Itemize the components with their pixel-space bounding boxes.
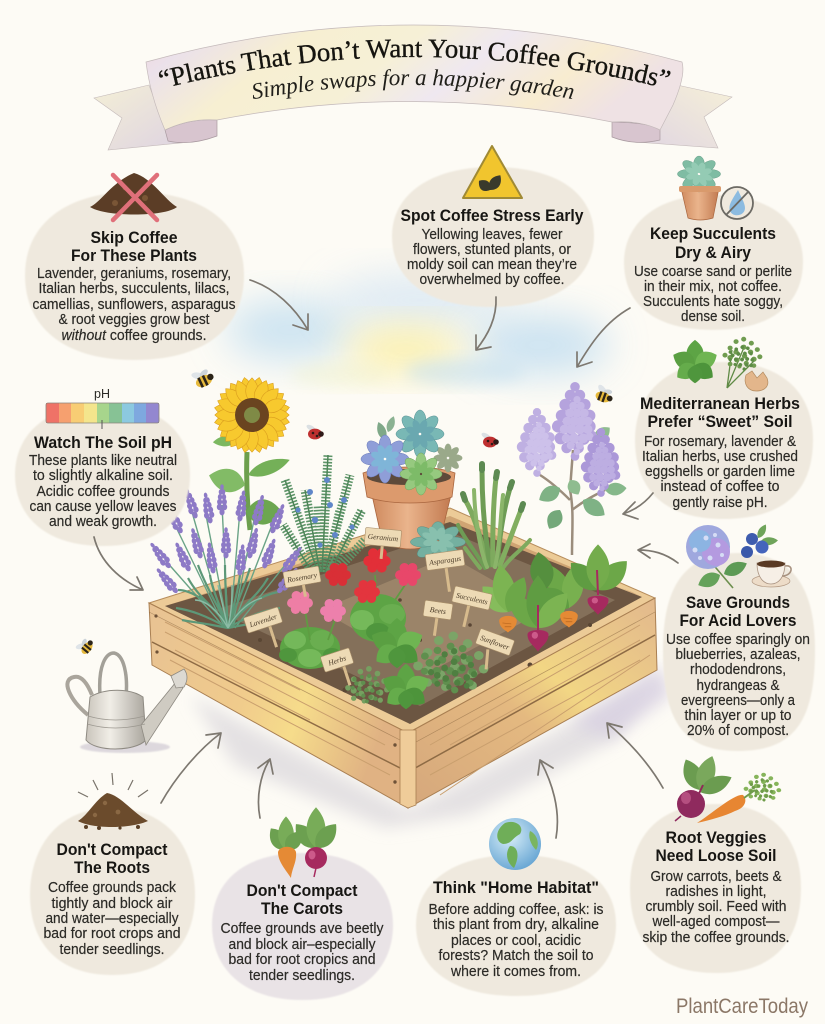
text block: camellias, sunflowers, asparagus (32, 297, 236, 313)
label: Succulents: Succulents (455, 590, 489, 606)
icon: globe (489, 818, 541, 870)
heading (71, 228, 197, 265)
label: Asparagus (425, 549, 468, 594)
bed soil (165, 522, 642, 724)
icon: bee near lilac (592, 382, 616, 405)
icon: ph scale (46, 387, 159, 429)
text block: Succulents hate soggy, (643, 294, 783, 310)
label: Lavender: Lavender (247, 612, 278, 629)
text block: tightly and block air (52, 896, 173, 912)
heading: The Carots (261, 899, 343, 918)
text block: this plant from dry, alkaline (433, 917, 599, 933)
arrow: carots to bed (258, 759, 273, 818)
plant: lavender (147, 484, 305, 628)
text block: Use coffee sparingly on (666, 632, 810, 648)
panel: skip coffee (25, 173, 244, 360)
plant: potted succulents (361, 410, 462, 549)
icon: coffee pile crossed out (90, 173, 177, 220)
text block: gently raise pH. (672, 495, 768, 511)
heading (656, 828, 776, 865)
text block: to slightly alkaline soil. (33, 468, 173, 484)
icon: eggshell (745, 371, 768, 391)
arrow: home habitat to bed (538, 760, 557, 838)
bed corner post (400, 730, 416, 808)
label: Succulents (447, 586, 492, 632)
raised wooden garden bed (149, 508, 657, 808)
heading: Skip Coffee (90, 228, 178, 247)
heading (246, 881, 358, 918)
label: Sunflower (468, 628, 515, 676)
heading: Dry & Airy (675, 243, 751, 262)
icon: soil pile with arrows (78, 773, 148, 830)
text block: hydrangeas & (696, 678, 780, 694)
panel: think home habitat (416, 818, 616, 996)
text block: and water—especially (46, 911, 179, 927)
panel: root veggies (630, 753, 801, 973)
heading: For Acid Lovers (680, 611, 796, 630)
panel: spot coffee stress (392, 146, 594, 307)
icon: hydrangea (686, 525, 750, 591)
text block: moldy soil can mean they’re (407, 257, 577, 273)
icon: ladybug (305, 423, 324, 439)
plant: asparagus (458, 464, 530, 568)
heading: Don't Compact (246, 881, 358, 900)
label: Rosemary: Rosemary (286, 570, 318, 585)
heading: For These Plants (71, 246, 197, 265)
text block: skip the coffee grounds. (642, 930, 790, 946)
subtitle: Simple swaps for a happier garden (253, 69, 574, 99)
text block: Before adding coffee, ask: is (428, 902, 604, 918)
icon: no water (721, 187, 753, 219)
text block: Yellowing leaves, fewer (422, 227, 563, 243)
label: Beets: Beets (429, 605, 447, 616)
text block: thin layer or up to (684, 708, 792, 724)
plant: root vegetables (475, 544, 634, 651)
bed outer rim (149, 508, 655, 733)
text block (666, 632, 810, 739)
heading (680, 593, 796, 630)
bed right face (408, 598, 657, 808)
heading: Root Veggies (666, 828, 766, 847)
heading: Watch The Soil pH (34, 433, 172, 452)
text block: overwhelmed by coffee. (420, 272, 564, 288)
heading: The Roots (74, 858, 150, 877)
label: Herbs (320, 648, 360, 691)
soil speckles (258, 588, 592, 692)
panel: mediterranean herbs (635, 337, 813, 519)
arrow: succulents to bed (577, 308, 630, 367)
text block: 20% of compost. (687, 723, 789, 739)
heading: Mediterranean Herbs (640, 394, 800, 413)
text block: places or cool, acidic (451, 933, 581, 949)
title: “Plants That Don’t Want Your Coffee Grounds” (158, 39, 670, 86)
label: Rosemary (283, 566, 323, 600)
text block: Italian herbs, succulents, lilacs, (38, 281, 230, 297)
bed left face (149, 603, 408, 808)
text block: tender seedlings. (60, 942, 164, 958)
icon: bee near watering can (73, 634, 96, 657)
watercolor sky wash (225, 274, 610, 387)
label: Geranium (363, 527, 402, 560)
panel: keep succulents dry (624, 156, 803, 330)
text block (220, 921, 384, 984)
text block: Italian herbs, use crushed (642, 449, 798, 465)
text block: dense soil. (681, 309, 745, 325)
arrow: spot stress to bed (476, 297, 496, 350)
text block: Lavender, geraniums, rosemary, (37, 266, 231, 282)
text block: tender seedlings. (249, 968, 355, 984)
text block: For rosemary, lavender & (644, 434, 796, 450)
arrow: acid lovers to bed (638, 544, 678, 563)
text block: instead of coffee to (660, 479, 780, 495)
text block: flowers, stunted plants, or (413, 242, 571, 258)
label: Sunflower: Sunflower (479, 633, 511, 652)
icon: warning triangle (463, 146, 522, 198)
icon: ladybug right (480, 431, 499, 447)
arrow: ph to bed (94, 537, 143, 590)
text block: radishes in light, (666, 884, 766, 900)
label: Beets (421, 600, 453, 638)
text block: and block air–especially (228, 937, 376, 953)
heading (56, 840, 168, 877)
text block (29, 453, 177, 530)
icon: ph scale: pH (94, 387, 110, 401)
plant: herbs (345, 618, 489, 710)
icon: carrot (697, 773, 781, 823)
text block: Coffee grounds pack (48, 880, 177, 896)
banner tails (94, 85, 732, 150)
text block: blueberries, azaleas, (676, 647, 800, 663)
text block: Use coarse sand or perlite (634, 264, 792, 280)
insects (73, 364, 616, 657)
text block (407, 227, 577, 288)
text block: bad for root cropics and (228, 952, 376, 968)
arrow: herbs to bed (623, 493, 653, 519)
arrow: root veggies to bed (607, 723, 663, 788)
label: Asparagus: Asparagus (428, 554, 462, 567)
banner folds (165, 120, 660, 143)
text block: well-aged compost— (652, 914, 780, 930)
icon: potted succulent (677, 156, 721, 220)
panel: save grounds (663, 523, 815, 751)
plant labels (243, 527, 515, 691)
ground shadow (190, 665, 672, 828)
plant: geraniums (279, 548, 421, 669)
icon: beet (675, 753, 735, 821)
icon: thyme bundle (722, 337, 762, 388)
text block (634, 264, 792, 325)
heading: Prefer “Sweet” Soil (648, 412, 792, 431)
text block: forests? Match the soil to (438, 948, 594, 964)
heading: Think "Home Habitat" (433, 878, 599, 897)
text block: crumbly soil. Feed with (646, 899, 786, 915)
text block: Acidic coffee grounds (36, 484, 170, 500)
heading: Spot Coffee Stress Early (400, 206, 584, 225)
icon: basil (670, 340, 720, 384)
bed plank seams (149, 612, 655, 795)
text block: eggshells or garden lime (645, 464, 795, 480)
heading (640, 394, 800, 431)
icon: bee (188, 364, 216, 391)
title banner (94, 24, 732, 150)
plant: sunflower (206, 376, 292, 530)
icon: blueberries (741, 523, 778, 558)
text block: bad for root crops and (44, 926, 180, 942)
text block: can cause yellow leaves (30, 499, 176, 515)
heading: Don't Compact (56, 840, 168, 859)
label: Lavender (243, 607, 289, 654)
heading: Keep Succulents (650, 224, 776, 243)
heading (650, 224, 776, 262)
plant: ground succulent (410, 521, 466, 562)
label: Geranium: Geranium (367, 532, 399, 543)
plant: rosemary (283, 455, 365, 572)
text block: evergreens—only a (681, 693, 796, 709)
text block: in their mix, not coffee. (644, 279, 782, 295)
bed inner back wall (165, 516, 642, 606)
panel: don't compact the roots (30, 773, 195, 975)
plant: lilac (517, 382, 627, 555)
heading: Save Grounds (686, 593, 790, 612)
icon: watering can (67, 653, 187, 753)
heading: Need Loose Soil (656, 846, 776, 865)
text block: without coffee grounds. (62, 328, 206, 344)
text block: and weak growth. (49, 514, 157, 530)
panel: watch the soil ph (15, 387, 190, 546)
text block: where it comes from. (450, 964, 581, 980)
arrow: skip coffee to bed (250, 280, 308, 330)
label: Herbs: Herbs (326, 653, 347, 668)
arrow: roots to bed (161, 733, 221, 803)
text block (44, 880, 180, 958)
text block (428, 902, 604, 980)
watermark: PlantCareToday (676, 995, 808, 1018)
text block: & root veggies grow best (58, 312, 210, 328)
text block: These plants like neutral (29, 453, 177, 469)
icon: coffee cup (752, 560, 791, 587)
panel: don't compact the carots (212, 807, 393, 1000)
text block: Coffee grounds ave beetly (220, 921, 384, 937)
text block (642, 434, 798, 511)
text block: rhododendrons, (690, 662, 786, 678)
text block (642, 869, 790, 946)
icon: carrot and beet (264, 807, 342, 878)
text block: Grow carrots, beets & (650, 869, 782, 885)
banner ribbon (146, 25, 683, 130)
arrows (94, 280, 678, 838)
text block (32, 266, 236, 344)
